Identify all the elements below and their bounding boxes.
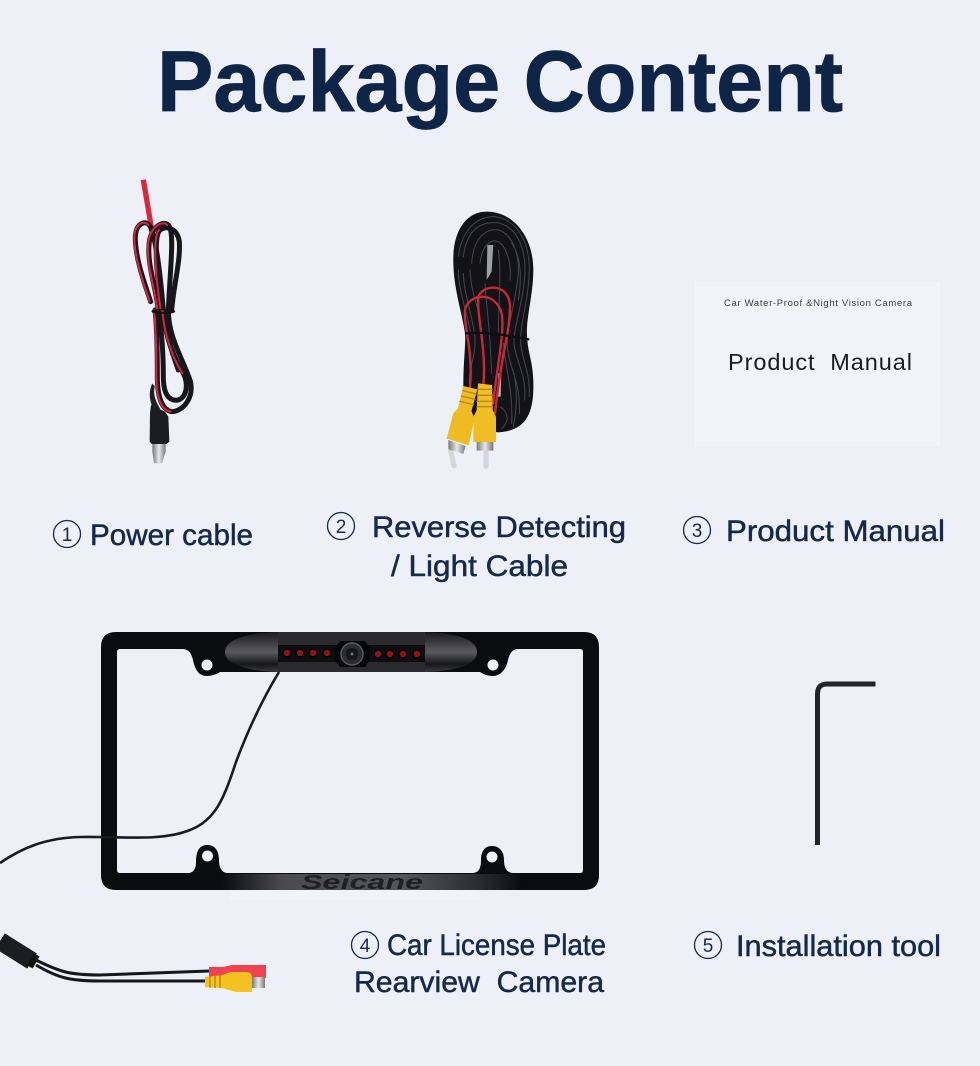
label 2 <box>328 511 626 583</box>
label 3: 3 <box>692 521 702 542</box>
label 3: Product Manual <box>726 515 945 548</box>
RCA plugs <box>205 965 266 992</box>
label 4 <box>352 929 606 999</box>
item 3: product manual photo <box>695 282 940 446</box>
label 2: 2 <box>336 517 346 538</box>
camera bar <box>225 632 477 672</box>
label 2: / Light Cable <box>391 550 568 583</box>
bottom bar sheen <box>222 874 522 890</box>
title: Package Content <box>157 34 843 130</box>
label 5: 5 <box>703 936 713 957</box>
label 2: Reverse Detecting <box>372 511 626 544</box>
item 4: license plate camera photo <box>0 632 599 992</box>
manual subtitle: Car Water-Proof &Night Vision Camera <box>724 298 913 309</box>
item 2: reverse detecting / light cable photo <box>447 212 533 466</box>
camera lens <box>335 641 370 667</box>
label 5: Installation tool <box>736 930 941 963</box>
label 4: Car License Plate <box>387 929 606 962</box>
label 4: 4 <box>360 936 371 957</box>
item 5: hex key tool <box>818 684 876 845</box>
connector and split wires <box>0 941 209 981</box>
manual heading: Product Manual <box>728 349 912 375</box>
camera wire <box>0 672 279 863</box>
infrared LEDs <box>283 649 421 658</box>
reflection under bar <box>230 890 480 900</box>
item 1: power cable photo <box>134 179 191 463</box>
label 4: Rearview Camera <box>354 966 604 999</box>
manual sheet <box>695 282 940 446</box>
label 1: Power cable <box>90 519 253 552</box>
brand logo: Seicane <box>301 872 423 894</box>
label 1: 1 <box>62 525 72 546</box>
plate frame <box>101 632 599 890</box>
mounting holes <box>202 660 498 862</box>
